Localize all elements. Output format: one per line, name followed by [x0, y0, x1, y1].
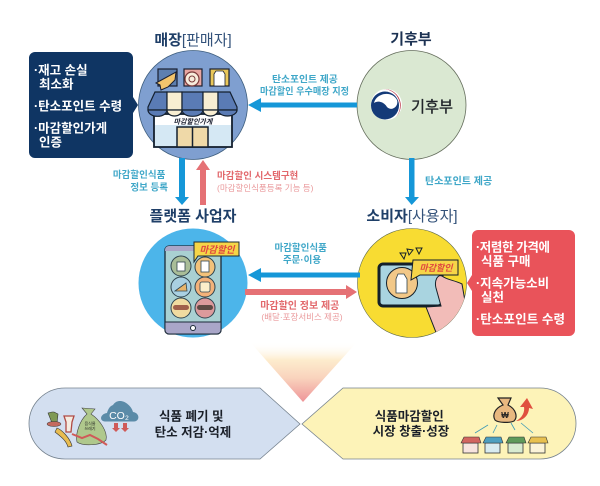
- arrow: large gradient chevron: [250, 342, 357, 402]
- label: food information registration: 마감할인식품: [113, 169, 166, 181]
- heading: platform operator: 플랫폼 사업자: [150, 208, 237, 225]
- panel: seller benefits: ·재고 손실: [34, 62, 88, 78]
- label: order and use: 주문·이용: [283, 255, 321, 266]
- icon: discount store circle: 마감할인가게: [174, 118, 214, 126]
- label: order and use: [274, 242, 330, 266]
- panel: consumer benefits: ·탄소포인트 수령: [476, 312, 565, 326]
- label: food information registration: [113, 169, 168, 194]
- label: order and use: 마감할인식품: [274, 242, 327, 254]
- label: system setup: [217, 166, 314, 193]
- label: carbon points and excellent store designation: 탄소포인트 제공: [272, 72, 338, 86]
- arrow: platform to store: [196, 160, 210, 205]
- panel: consumer benefits: 실천: [481, 290, 504, 304]
- icon: platform phone circle: [138, 228, 248, 338]
- panel: food waste and carbon outcome: [29, 388, 300, 459]
- text: market creation and growth: 시장 창출·성장: [373, 424, 450, 438]
- label: carbon points provided: 탄소포인트 제공: [425, 174, 492, 188]
- icon: ministry logo circle: [357, 50, 466, 160]
- icon: food waste and carbon cloud: CO₂: [109, 410, 129, 422]
- icon: food waste and carbon cloud: 쓰레기: [84, 425, 96, 431]
- icon: platform phone circle: 마감할인: [200, 244, 236, 256]
- label: system setup: 마감할인 시스템구현: [217, 170, 298, 182]
- heading: store (seller): 매장[판매자]: [154, 32, 232, 49]
- arrow: consumer to platform: [248, 268, 360, 282]
- panel: consumer benefits: ·지속가능소비: [476, 276, 549, 290]
- label: carbon points and excellent store designation: [260, 72, 349, 98]
- label: carbon points and excellent store designation: 마감할인 우수매장 지정: [260, 84, 349, 98]
- label: system setup: (마감할인식품등록 기능 등): [217, 183, 314, 193]
- label: food information registration: 정보 등록: [130, 182, 168, 194]
- label: discount info provided: [260, 296, 344, 322]
- panel: consumer benefits: 식품 구매: [481, 254, 530, 268]
- heading: consumer (user): 소비자[사용자]: [366, 208, 458, 225]
- icon: money bag and shops: ₩: [501, 411, 509, 420]
- icon: food waste and carbon cloud: [47, 401, 138, 447]
- panel: consumer benefits: [467, 230, 575, 336]
- panel: seller benefits: ·탄소포인트 수령: [34, 100, 122, 114]
- text: food waste and carbon reduction: 식품 폐기 및: [159, 408, 223, 424]
- panel: seller benefits: 최소화: [39, 76, 74, 92]
- icon: money bag and shops: [461, 398, 548, 453]
- text: food waste and carbon reduction: 탄소 저감·억제: [155, 424, 231, 440]
- arrow: ministry to consumer: [405, 158, 419, 205]
- icon: ministry logo circle: 기후부: [411, 98, 453, 116]
- heading: ministry: 기후부: [390, 31, 432, 48]
- icon: consumer tablet circle: [358, 228, 470, 340]
- label: discount info provided: (배달·포장서비스 제공): [261, 312, 343, 322]
- panel: seller benefits: [29, 52, 138, 158]
- arrow: platform to consumer: [245, 285, 357, 299]
- label: discount info provided: 마감할인 정보 제공: [260, 299, 339, 312]
- icon: consumer tablet circle: 마감할인: [419, 263, 454, 273]
- panel: market growth outcome: [302, 388, 576, 459]
- panel: seller benefits: 인증: [39, 136, 62, 150]
- icon: discount store circle: [138, 50, 248, 160]
- arrow: store to platform: [175, 158, 189, 205]
- icon: food waste and carbon cloud: 음식물: [84, 420, 96, 426]
- arrow: ministry to store: [248, 98, 357, 112]
- panel: consumer benefits: ·저렴한 가격에: [476, 240, 550, 254]
- panel: seller benefits: ·마감할인가게: [34, 120, 107, 136]
- text: market creation and growth: 식품마감할인: [375, 410, 444, 424]
